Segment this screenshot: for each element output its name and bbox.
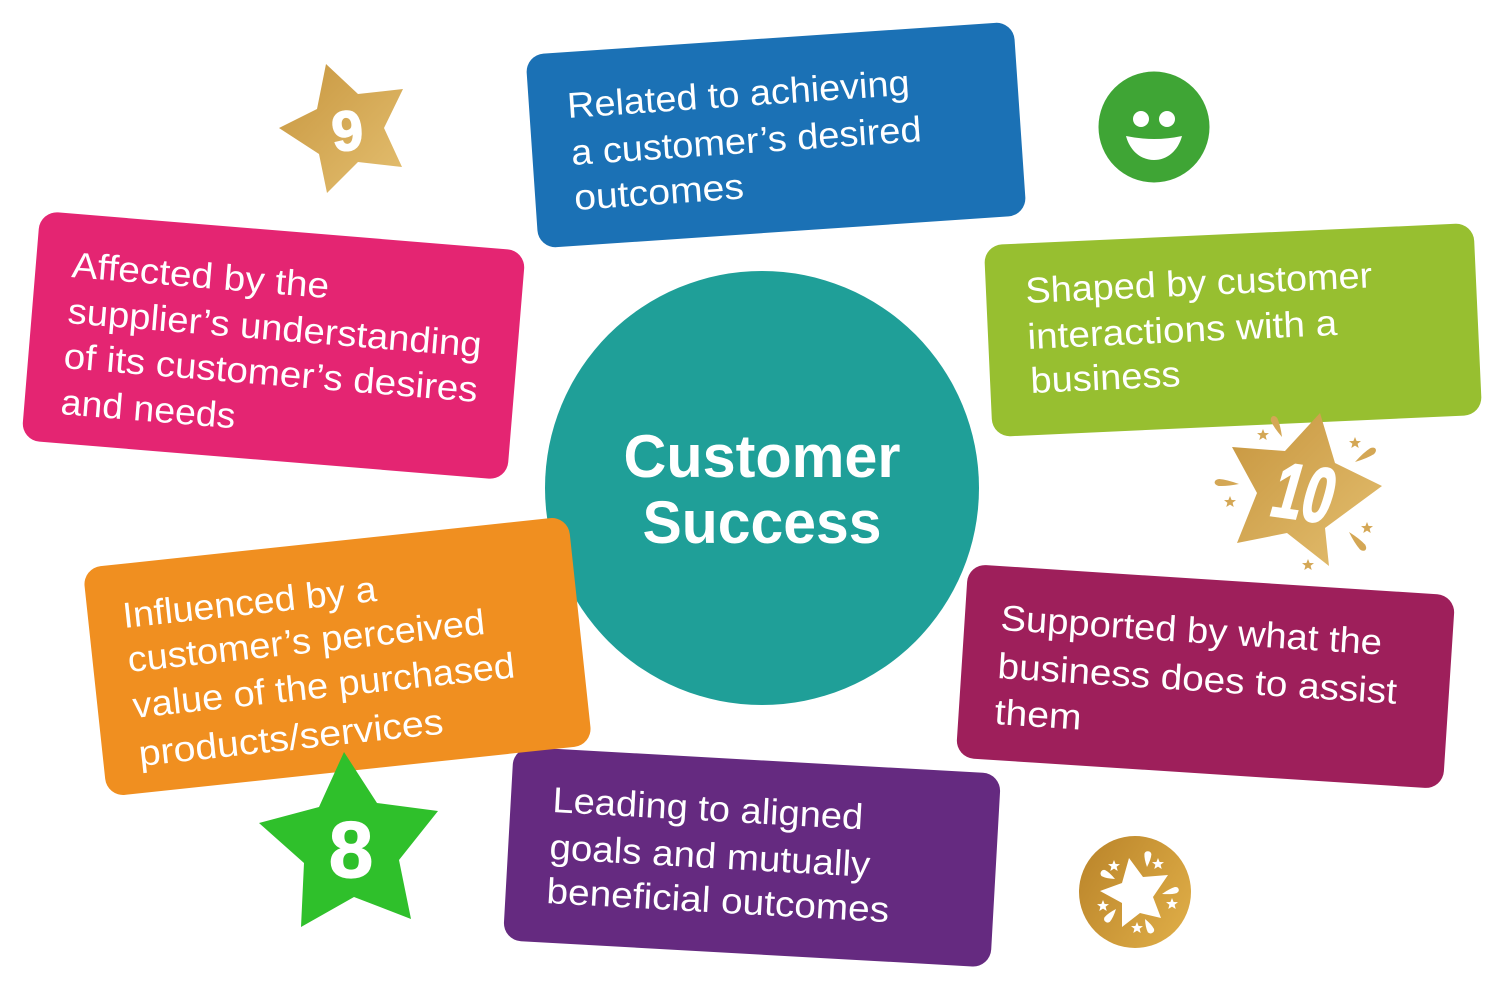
- panel: purple, aligned goals: goals and mutually: [549, 826, 871, 885]
- central circle: Customer Success: Success: [642, 489, 882, 556]
- icon: gold star number 10 with sparkles: 10: [1263, 446, 1346, 540]
- panel: lime green, customer interactions: [984, 223, 1482, 437]
- panel: blue, desired outcomes: [525, 22, 1027, 248]
- panel: purple, aligned goals: [503, 747, 1001, 967]
- panel: blue, desired outcomes: Related to achieving: [566, 62, 911, 126]
- icon: green smiley: [1098, 72, 1210, 182]
- panel: pink, supplier understanding: of its customer’s desires: [62, 335, 479, 410]
- panel: blue, desired outcomes: outcomes: [573, 166, 745, 218]
- icon: gold star number 9: 9: [329, 98, 366, 163]
- panel: purple, aligned goals: beneficial outcomes: [546, 870, 890, 930]
- panel: purple, aligned goals: Leading to aligned: [552, 779, 864, 837]
- panel: lime green, customer interactions: business: [1030, 353, 1181, 401]
- panel: pink, supplier understanding: supplier’s understanding: [66, 290, 483, 365]
- panel: blue, desired outcomes: a customer’s desired: [570, 108, 923, 173]
- icon: green star number 8: [259, 752, 438, 927]
- panel: lime green, customer interactions: interactions with a: [1027, 302, 1339, 357]
- panel: maroon, business support: Supported by what the: [999, 597, 1383, 663]
- icon: gold star number 10 with sparkles: [1214, 413, 1382, 570]
- central circle: Customer Success: Customer: [624, 423, 900, 490]
- panel: orange, perceived value: customer’s perceived: [125, 601, 487, 680]
- panel: orange, perceived value: products/services: [136, 701, 445, 774]
- panel: maroon, business support: business does to assist: [996, 645, 1398, 712]
- panel: pink, supplier understanding: Affected by the: [70, 244, 331, 306]
- panel: orange, perceived value: Influenced by a: [120, 568, 379, 636]
- panel: maroon, business support: them: [993, 691, 1083, 738]
- panel: maroon, business support: [956, 564, 1455, 789]
- panel: pink, supplier understanding: and needs: [59, 381, 237, 436]
- panel: orange, perceived value: value of the purchased: [130, 644, 517, 726]
- panel: pink, supplier understanding: [21, 211, 526, 480]
- central circle: Customer Success: [545, 271, 979, 705]
- icon: green star number 8: 8: [329, 805, 373, 894]
- panel: orange, perceived value: [83, 516, 592, 797]
- panel: lime green, customer interactions: Shaped by customer: [1025, 254, 1373, 311]
- icon: gold medal with star: [1079, 836, 1191, 948]
- icon: gold star number 9: [279, 64, 403, 193]
